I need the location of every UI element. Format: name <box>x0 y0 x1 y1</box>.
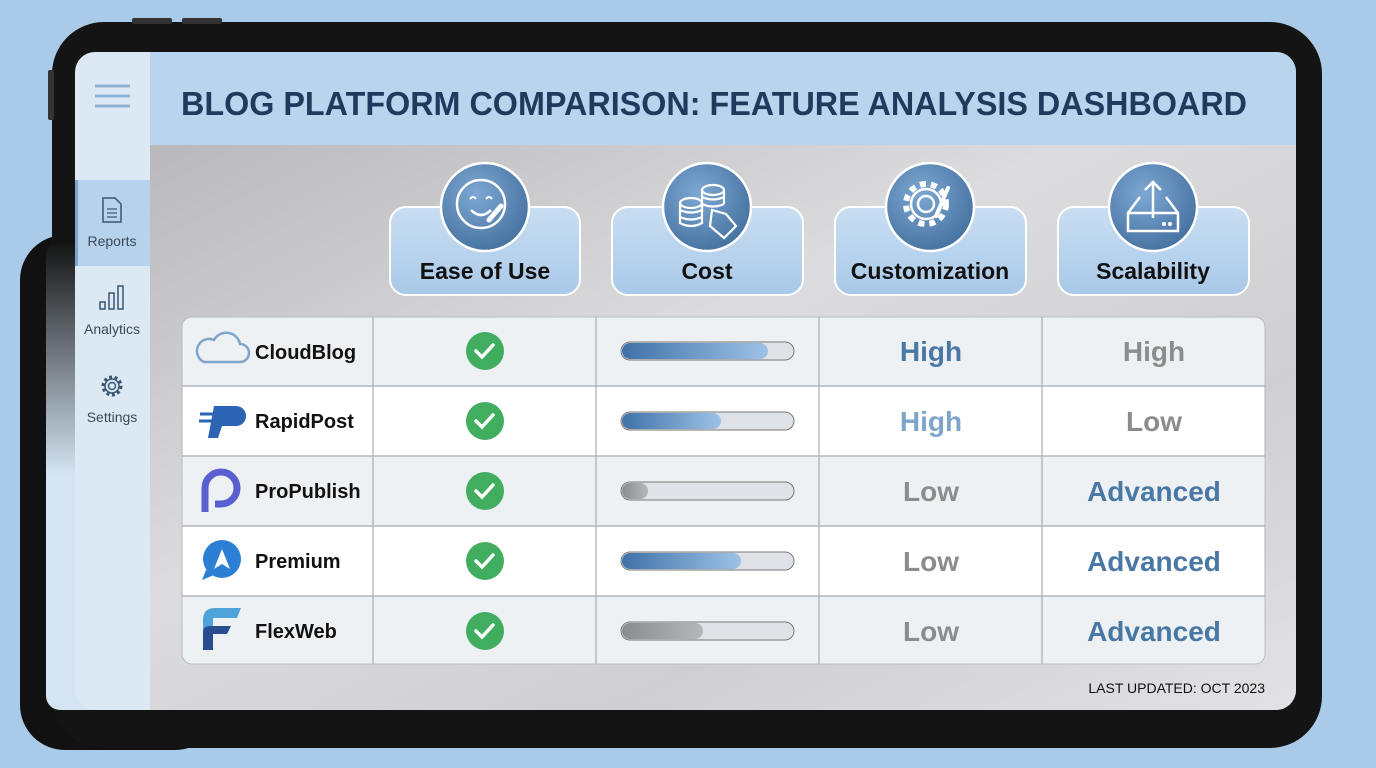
row: CloudBlog: High <box>900 336 962 367</box>
row: Premium <box>202 540 1221 580</box>
footer: last updated: LAST UPDATED: OCT 2023 <box>1088 680 1265 696</box>
row: Premium: Premium <box>255 551 341 573</box>
row: RapidPost: High <box>900 406 962 437</box>
card: customization <box>835 163 1026 295</box>
row: FlexWeb: FlexWeb <box>255 621 337 643</box>
row: ProPublish: Low <box>903 476 959 507</box>
screen <box>75 52 1296 710</box>
row: RapidPost: Low <box>1126 406 1182 437</box>
comparison table <box>182 317 1265 664</box>
row: RapidPost <box>199 402 1182 440</box>
row: Premium: Low <box>903 546 959 577</box>
card: cost: Cost <box>681 258 733 284</box>
card: customization: Customization <box>851 258 1009 284</box>
card: ease of use <box>390 163 580 295</box>
nav: analytics: Analytics <box>84 321 140 337</box>
icon: hamburger menu <box>95 86 130 106</box>
sidebar extension <box>46 240 106 710</box>
nav: analytics <box>84 286 140 337</box>
row: CloudBlog <box>197 332 1185 370</box>
nav: settings <box>87 377 137 425</box>
nav: reports (active) <box>75 180 150 266</box>
row: Premium: Advanced <box>1087 546 1221 577</box>
back tablet <box>20 235 220 750</box>
title: BLOG PLATFORM COMPARISON: FEATURE ANALYSIS DASHBOARD <box>181 85 1247 122</box>
row: ProPublish: Advanced <box>1087 476 1221 507</box>
row: FlexWeb: Low <box>903 616 959 647</box>
card: scalability: Scalability <box>1096 258 1210 284</box>
row: RapidPost: RapidPost <box>255 411 354 433</box>
nav: settings: Settings <box>87 409 137 425</box>
row: ProPublish <box>205 472 1221 512</box>
card: ease of use: Ease of Use <box>420 258 550 284</box>
nav: reports (active): Reports <box>87 233 137 249</box>
row: CloudBlog: High <box>1123 336 1185 367</box>
card: scalability <box>1058 163 1249 295</box>
row: ProPublish: ProPublish <box>255 481 361 503</box>
row: FlexWeb: Advanced <box>1087 616 1221 647</box>
header cards <box>390 163 1249 295</box>
card: cost <box>612 163 803 295</box>
row: CloudBlog: CloudBlog <box>255 342 356 364</box>
row: FlexWeb <box>203 608 1221 650</box>
sidebar <box>75 86 150 425</box>
